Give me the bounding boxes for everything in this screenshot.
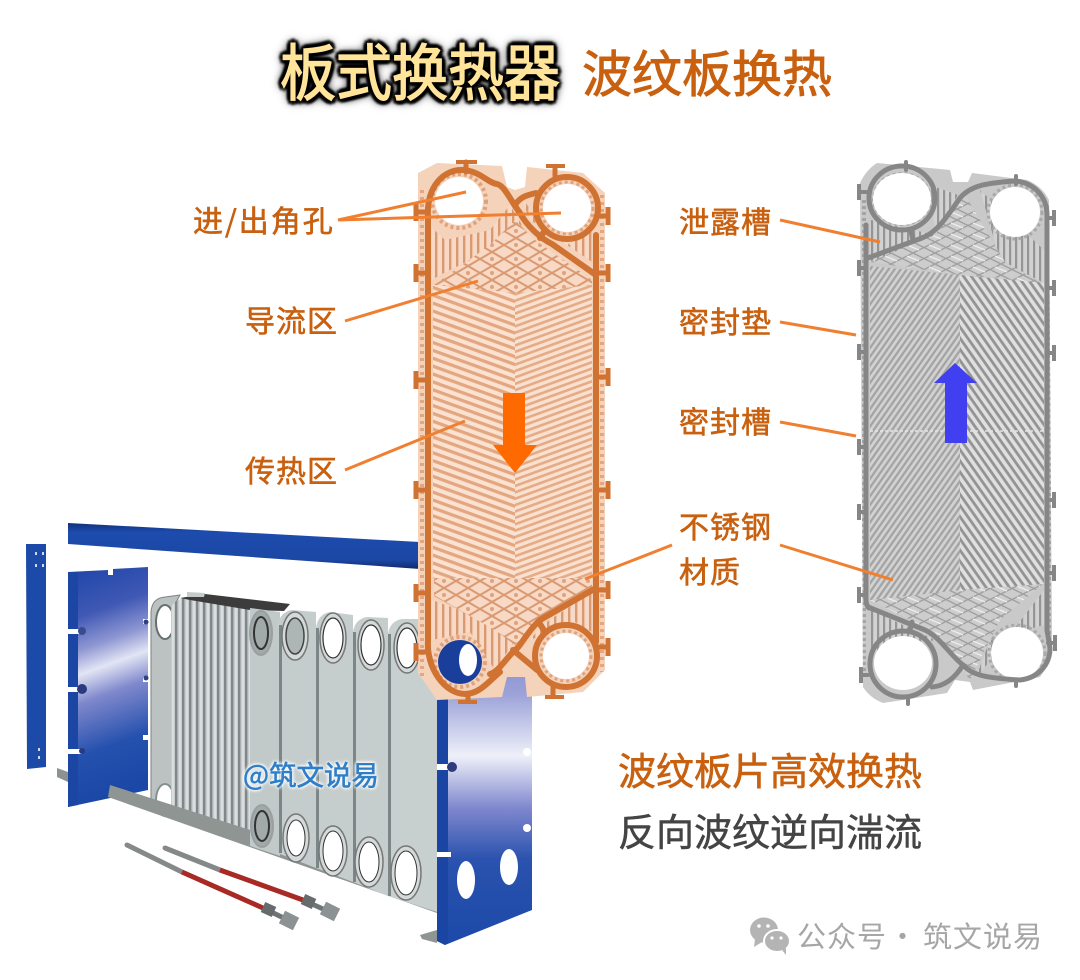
arrow: orange flow down: [493, 393, 537, 473]
loose plate 1: [250, 608, 280, 856]
caption: orange line: 波纹板片高效换热: [618, 741, 922, 796]
tie rod 2: [165, 848, 337, 915]
plate body: [418, 163, 605, 700]
loose plate 3: [316, 612, 353, 882]
lower guide rail: [108, 785, 437, 913]
watermark on machine: @筑文说易: [243, 753, 379, 793]
footer account name: 筑文说易: [923, 914, 1043, 956]
grey corrugated plate: [859, 162, 1055, 704]
front frame plate: [420, 639, 532, 945]
label: heat transfer zone: 传热区: [245, 447, 338, 491]
exploded plate heat exchanger illustration: [26, 523, 532, 945]
title: subtitle: 波纹板换热: [582, 35, 832, 107]
icon: wechat: [750, 918, 790, 955]
label: seal groove: 密封槽: [679, 398, 772, 442]
label: gasket: 密封垫: [679, 298, 772, 342]
loose plate 5: [388, 619, 437, 912]
edge beads: [864, 200, 1049, 680]
tie rod 1: [127, 845, 296, 924]
end strip: [26, 544, 46, 769]
arrow: blue flow up: [934, 363, 977, 443]
footer account name: [797, 914, 1043, 956]
flow distribution mesh: [871, 200, 1039, 282]
heat transfer corrugation: [870, 266, 960, 600]
label: flow guide zone: 导流区: [245, 297, 338, 341]
footer account name: ·: [888, 914, 917, 956]
port ribs: [870, 220, 935, 262]
gasket: [859, 162, 1055, 704]
heat transfer corrugation: [433, 285, 515, 578]
leader lines: [338, 192, 893, 580]
port ribs: [432, 205, 522, 280]
fixed rear frame plate: [68, 567, 149, 807]
edge beads: [422, 190, 602, 680]
gasket: [416, 162, 608, 702]
loose plate 2: [278, 610, 316, 868]
flow distribution mesh: [434, 220, 592, 293]
plate pack ribs: [171, 592, 290, 846]
footer account name: 公众号: [797, 914, 887, 956]
rear loose plate: [151, 595, 180, 818]
loose plate 4: [353, 617, 388, 896]
label: stainless steel material: 不锈钢: [679, 503, 772, 547]
label: stainless steel material: [679, 503, 772, 592]
title: main: 板式换热器: [280, 25, 560, 114]
top carrying beam: [68, 523, 420, 569]
label: inlet/outlet ports: 进/出角孔: [193, 197, 335, 241]
plate body: [860, 163, 1052, 703]
label: stainless steel material: 材质: [679, 548, 741, 592]
caption: dark line: 反向波纹逆向湍流: [618, 802, 922, 857]
label: leak groove: 泄露槽: [679, 198, 772, 242]
orange corrugated plate: [416, 162, 608, 702]
lower guide rail stub: [57, 768, 68, 782]
